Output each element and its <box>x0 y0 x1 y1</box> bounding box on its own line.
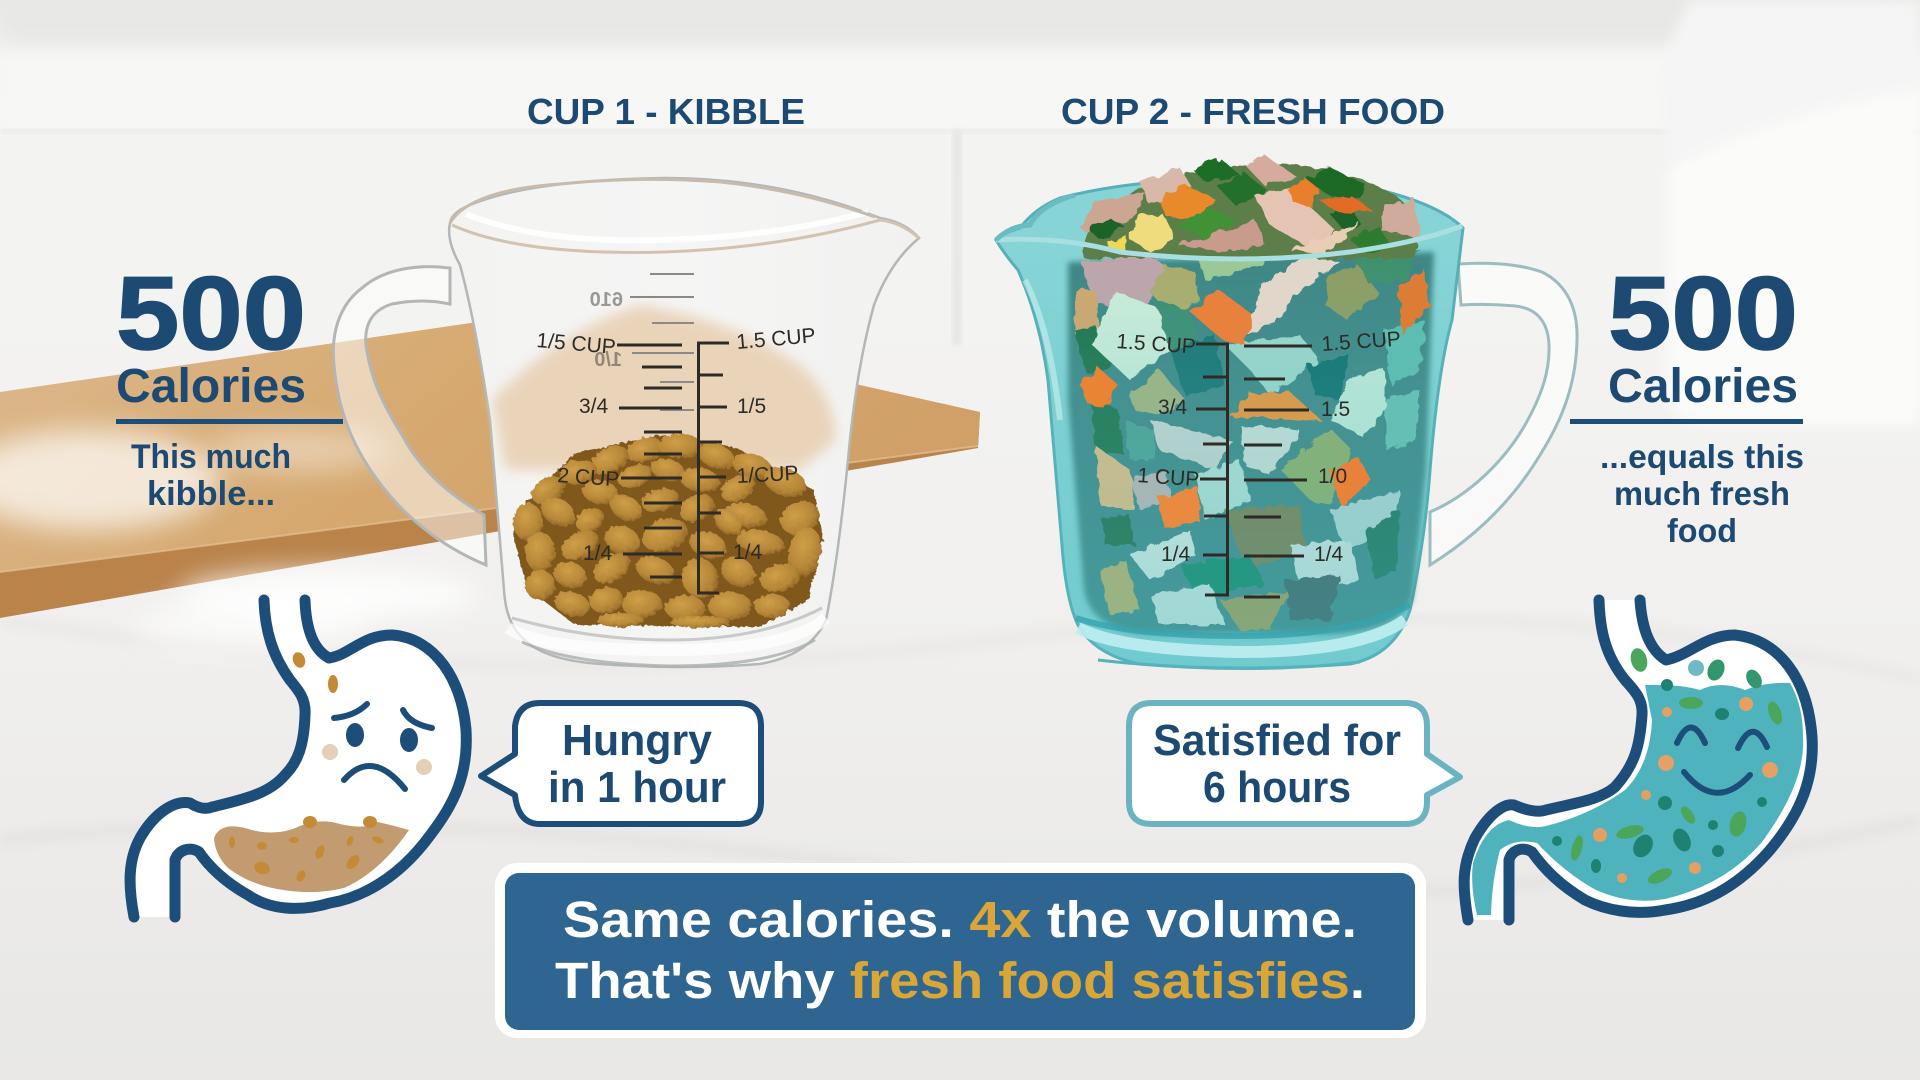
sad face <box>322 704 432 789</box>
right caption: food <box>1667 512 1737 549</box>
happy stomach outline <box>1464 600 1642 920</box>
callout: satisfied for 6 hours: Satisfied for <box>1153 716 1401 765</box>
cup 1 rim and base highlights <box>450 179 919 666</box>
cup 1 markings: 1/5 <box>737 395 766 418</box>
flour dust <box>0 428 480 649</box>
callout: hungry in 1 hour: in 1 hour <box>548 763 726 812</box>
cup 1 tan refraction of board <box>492 305 836 470</box>
heading: cup 2: CUP 2 - FRESH FOOD <box>1061 91 1445 132</box>
right unit: Calories <box>1608 360 1798 413</box>
cup 2 markings <box>1116 328 1402 597</box>
callout: hungry in 1 hour: Hungry <box>562 716 713 765</box>
callout: satisfied for 6 hours: 6 hours <box>1203 763 1351 812</box>
cup 1 markings <box>536 274 817 593</box>
kibble bits <box>229 650 385 883</box>
banner line 1: Same calories. 4x the volume. <box>563 891 1357 948</box>
cup 1 markings: 2 CUP <box>557 464 620 491</box>
cup 2 body <box>996 178 1463 668</box>
cup 2 handle <box>1430 263 1577 565</box>
cup 2 markings: 1.5 CUP <box>1116 330 1196 359</box>
food base <box>1068 252 1434 634</box>
banner fill <box>505 873 1415 1030</box>
cup 2 markings: 1.5 CUP <box>1321 328 1402 356</box>
left caption: kibble... <box>147 475 275 513</box>
cup 1 markings: 1/4 <box>733 541 763 564</box>
cup 1 markings: 3/4 <box>579 395 609 418</box>
food bits <box>1552 646 1785 887</box>
kibble pile <box>513 433 825 628</box>
glass jar of flour <box>1664 0 1920 425</box>
cup 1 body <box>449 178 919 667</box>
measuring cup 2: glass with fresh food <box>996 155 1577 669</box>
left divider <box>116 419 343 424</box>
icon: happy stomach <box>1464 600 1812 920</box>
cup 1 handle <box>333 267 486 565</box>
cup 2 rim and base highlights <box>996 195 1462 669</box>
right caption <box>1600 438 1804 549</box>
cup 1 markings: 1/0 <box>594 349 622 371</box>
happy stomach teal contents <box>1472 683 1803 915</box>
callout: hungry in 1 hour <box>481 703 761 824</box>
cup 1 markings: 610 <box>590 289 623 311</box>
carrots and tuna over the glass tint <box>1080 252 1430 528</box>
callout: satisfied for 6 hours <box>1129 703 1460 824</box>
fresh food filling <box>1068 248 1434 634</box>
right divider <box>1570 419 1803 424</box>
measuring cup 1: glass with kibble <box>333 178 919 667</box>
right stat: 500 calories <box>1570 256 1804 549</box>
happy face <box>1658 728 1778 793</box>
sad stomach outline <box>130 600 305 917</box>
cup 2 markings: 1/0 <box>1318 465 1347 488</box>
sad stomach fill <box>130 600 466 917</box>
right number: 500 <box>1608 256 1798 372</box>
cup 2 teal glass overlay <box>1018 232 1456 668</box>
cup 2 markings: 1/4 <box>1314 543 1344 566</box>
right caption: much fresh <box>1614 475 1790 512</box>
cutting board <box>0 313 980 618</box>
left stat: 500 calories <box>116 256 343 513</box>
icon: sad stomach <box>130 600 466 917</box>
chopped pieces, interior <box>1075 248 1425 630</box>
heading: cup 1: CUP 1 - KIBBLE <box>527 91 805 132</box>
cup 1 markings: 1/CUP <box>736 462 799 488</box>
cup 1 markings: 1/4 <box>583 542 613 565</box>
top mound of food <box>1078 155 1420 258</box>
cup 2 markings: 1 CUP <box>1137 464 1200 491</box>
left caption: This much <box>131 438 291 476</box>
banner frame <box>495 863 1426 1038</box>
takeaway banner <box>495 863 1426 1038</box>
happy stomach white base <box>1464 600 1812 920</box>
right caption: ...equals this <box>1600 438 1804 475</box>
cup 2 markings: 1.5 <box>1321 398 1350 421</box>
banner line 2: That's why fresh food satisfies . <box>555 952 1365 1009</box>
left number: 500 <box>116 256 306 372</box>
left caption <box>131 438 291 513</box>
cup 1 markings: 1.5 CUP <box>735 324 817 354</box>
left unit: Calories <box>116 360 306 413</box>
cup 2 markings: 3/4 <box>1158 396 1188 419</box>
stomach contents <box>214 821 409 892</box>
cup 1 markings: 1/5 CUP <box>536 329 617 359</box>
cup 2 markings: 1/4 <box>1161 543 1191 566</box>
